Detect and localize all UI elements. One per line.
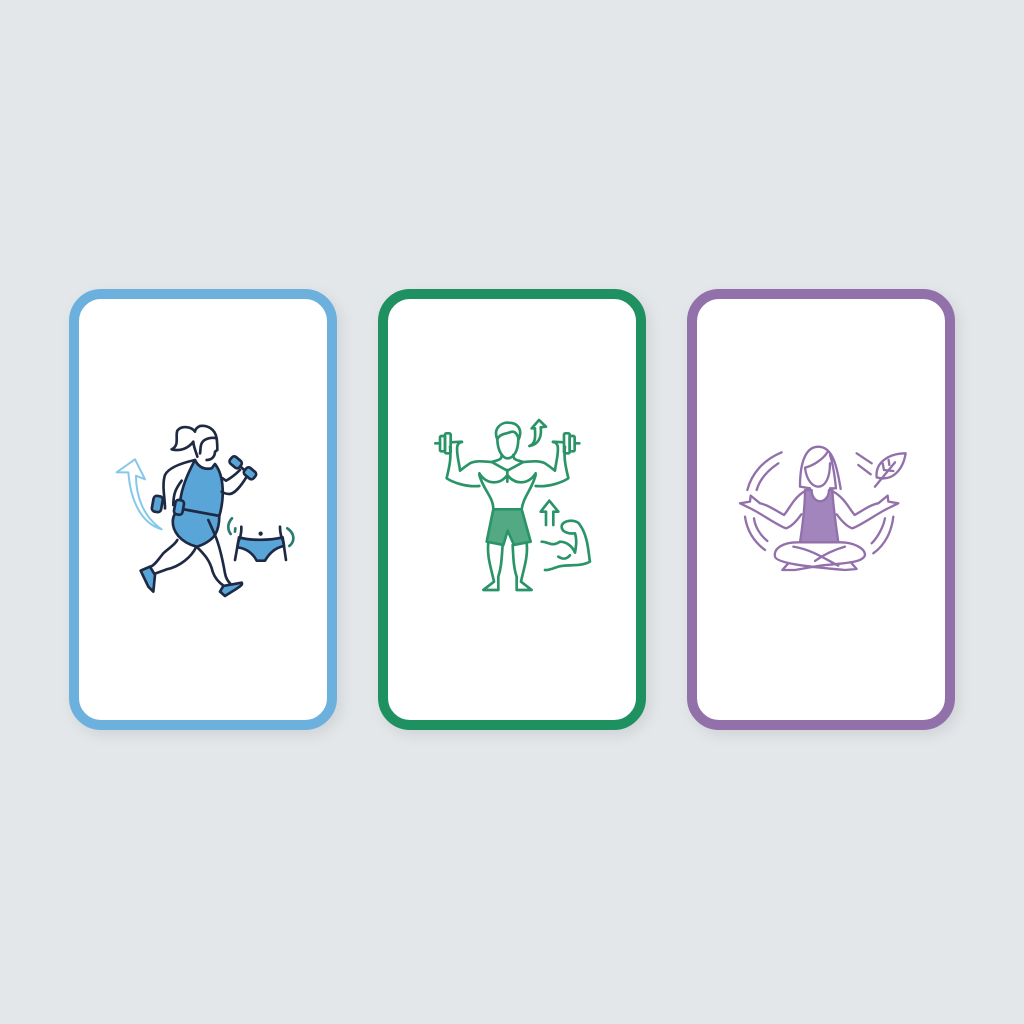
arms and hands (740, 492, 898, 528)
large up arrow (541, 501, 558, 525)
icon: muscular man with dumbbells (435, 420, 590, 590)
hair and face (800, 447, 841, 489)
panel: blue weight-loss card (69, 289, 337, 730)
small up arrow (529, 420, 546, 446)
right dumbbell (228, 455, 257, 481)
flexed bicep (542, 521, 590, 570)
man head (496, 423, 520, 458)
runner head and ponytail (172, 426, 217, 460)
icon: woman meditating with leaf (740, 447, 906, 570)
icon: running woman with dumbbells (117, 426, 293, 596)
right dumbbell (553, 442, 579, 443)
panel: purple wellness card (687, 289, 955, 730)
runner arms (164, 460, 247, 535)
tank top (800, 490, 838, 542)
man shorts (487, 509, 531, 545)
runner legs (151, 535, 230, 586)
man legs (483, 543, 532, 590)
runner shoes (141, 567, 242, 596)
man torso and arms (447, 442, 568, 509)
crossed legs (775, 542, 865, 570)
arrow: upward curve (117, 459, 162, 529)
waist and underwear (228, 518, 293, 561)
runner shorts (173, 509, 219, 547)
left dumbbell (151, 495, 185, 515)
runner top (180, 460, 223, 516)
panel: green muscle-gain card (378, 289, 646, 730)
left dumbbell (435, 442, 462, 443)
leaf (875, 453, 906, 487)
energy arcs (745, 452, 893, 553)
